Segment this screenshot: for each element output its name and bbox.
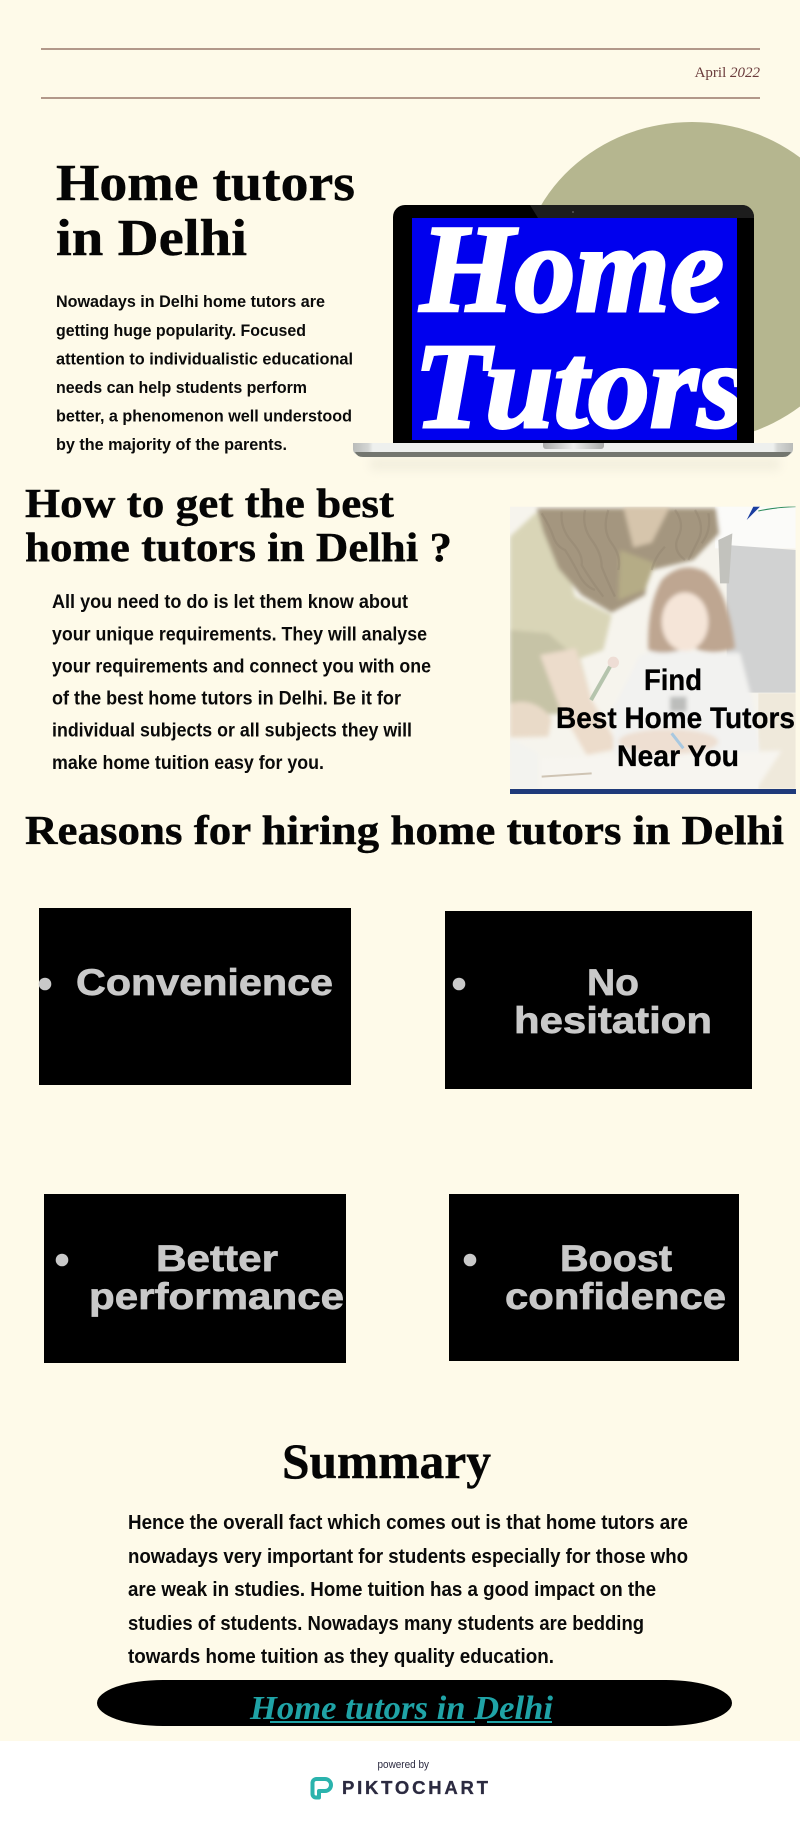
how-to text: of the best home tutors in Delhi. Be it for <box>52 688 402 710</box>
card: better performance: performance <box>89 1276 344 1317</box>
heading: how to get the best: How to get the best <box>25 480 394 526</box>
title: Home tutors <box>56 155 355 212</box>
card: convenience <box>39 908 351 1085</box>
footer <box>0 1741 800 1821</box>
how-to text <box>52 592 431 774</box>
card: better performance <box>44 1194 346 1363</box>
card: no hesitation: No <box>587 962 639 1003</box>
intro text: better, a phenomenon well understood <box>56 406 352 426</box>
footer: powered by <box>378 1759 429 1771</box>
how-to text: individual subjects or all subjects they will <box>52 720 412 742</box>
summary text: nowadays very important for students especially for those who <box>128 1546 688 1568</box>
card: boost confidence: confidence <box>505 1276 726 1317</box>
laptop illustration: Home <box>419 201 724 339</box>
how-to text: make home tuition easy for you. <box>52 753 324 774</box>
title: in Delhi <box>56 210 247 267</box>
card: boost confidence: Boost <box>560 1238 672 1279</box>
card: boost confidence <box>449 1194 739 1361</box>
photo caption <box>556 664 795 773</box>
intro text: by the majority of the parents. <box>56 435 287 454</box>
card: better performance: Better <box>156 1238 278 1279</box>
navy strip under photo <box>510 789 796 794</box>
summary text: towards home tuition as they quality education. <box>128 1646 554 1668</box>
photo caption: Near You <box>617 740 739 773</box>
summary text: studies of students. Nowadays many students are bedding <box>128 1613 644 1635</box>
laptop illustration: Tutors <box>414 319 746 454</box>
heading: summary: Summary <box>282 1433 491 1489</box>
card: convenience: Convenience <box>76 962 333 1003</box>
olive circle <box>541 122 800 432</box>
laptop illustration <box>353 201 793 470</box>
summary text: are weak in studies. Home tuition has a good impact on the <box>128 1579 656 1601</box>
intro text: needs can help students perform <box>56 378 307 397</box>
heading: reasons: Reasons for hiring home tutors in Delhi <box>25 807 784 853</box>
how-to text: your requirements and connect you with one <box>52 656 431 678</box>
footer: PIKTOCHART <box>342 1777 489 1798</box>
title <box>56 155 355 267</box>
photo: tutor and child <box>510 507 796 790</box>
card: no hesitation <box>445 911 752 1089</box>
black pill link <box>97 1680 732 1727</box>
intro text: getting huge popularity. Focused <box>56 321 306 340</box>
summary text <box>128 1512 688 1668</box>
summary text: Hence the overall fact which comes out is that home tutors are <box>128 1512 688 1534</box>
card: no hesitation: hesitation <box>514 1000 712 1041</box>
intro text: Nowadays in Delhi home tutors are <box>56 292 325 311</box>
how-to text: All you need to do is let them know about <box>52 592 409 613</box>
heading: how to get the best: home tutors in Delhi ? <box>25 524 452 570</box>
heading: how to get the best <box>25 480 452 570</box>
how-to text: your unique requirements. They will analyse <box>52 624 427 646</box>
intro text: attention to individualistic educational <box>56 350 353 368</box>
black pill link: Home tutors in Delhi <box>249 1690 554 1727</box>
photo caption: Find <box>644 664 702 697</box>
date: April 2022 <box>695 65 760 81</box>
intro text <box>56 292 353 454</box>
